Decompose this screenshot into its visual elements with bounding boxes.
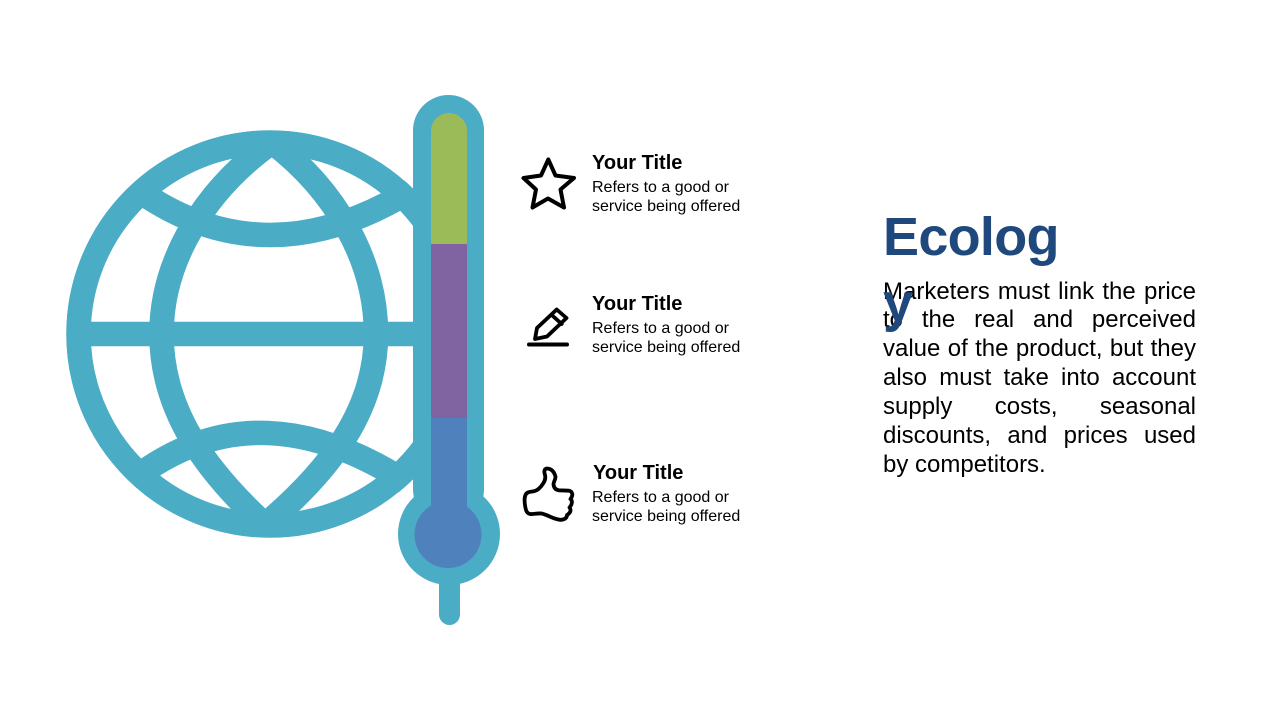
thermometer stem (439, 570, 460, 625)
item 1 title: Your Title (592, 152, 682, 174)
icon: thermometer (398, 95, 500, 625)
text block: item 1 (592, 152, 740, 215)
item 2 description (592, 320, 740, 356)
text block: item 2 (592, 293, 740, 356)
item 3 description (592, 489, 740, 525)
heading: y (883, 273, 912, 333)
body paragraph: Marketers must link the price to the real and perceived value of the product, but they also must take into account supply costs, seasonal discounts, and prices used by competitors. (883, 278, 1196, 478)
blue bulb fill (414, 501, 482, 568)
thermometer tube (413, 95, 484, 525)
item 2 title: Your Title (592, 293, 682, 315)
item 2 description: service being offered (592, 339, 740, 356)
text block: item 3 (592, 462, 740, 525)
item 3 title: Your Title (593, 462, 683, 484)
icon: star (524, 160, 574, 208)
heading: Ecolog (883, 207, 1059, 267)
item 1 description: service being offered (592, 198, 740, 215)
item 3 description: service being offered (592, 508, 740, 525)
item 3 description: Refers to a good or (592, 489, 729, 506)
icon: pencil (529, 310, 567, 344)
item 1 description: Refers to a good or (592, 179, 729, 196)
thermometer bulb (398, 483, 500, 585)
icon: thumbs up (525, 468, 572, 520)
blue level (431, 418, 467, 518)
purple level (431, 244, 467, 418)
graphic: globe and thermometer (66, 95, 576, 625)
heading (883, 207, 1059, 333)
item 2 description: Refers to a good or (592, 320, 729, 337)
green level (431, 113, 467, 244)
item 1 description (592, 179, 740, 215)
icon: globe (78, 142, 462, 526)
